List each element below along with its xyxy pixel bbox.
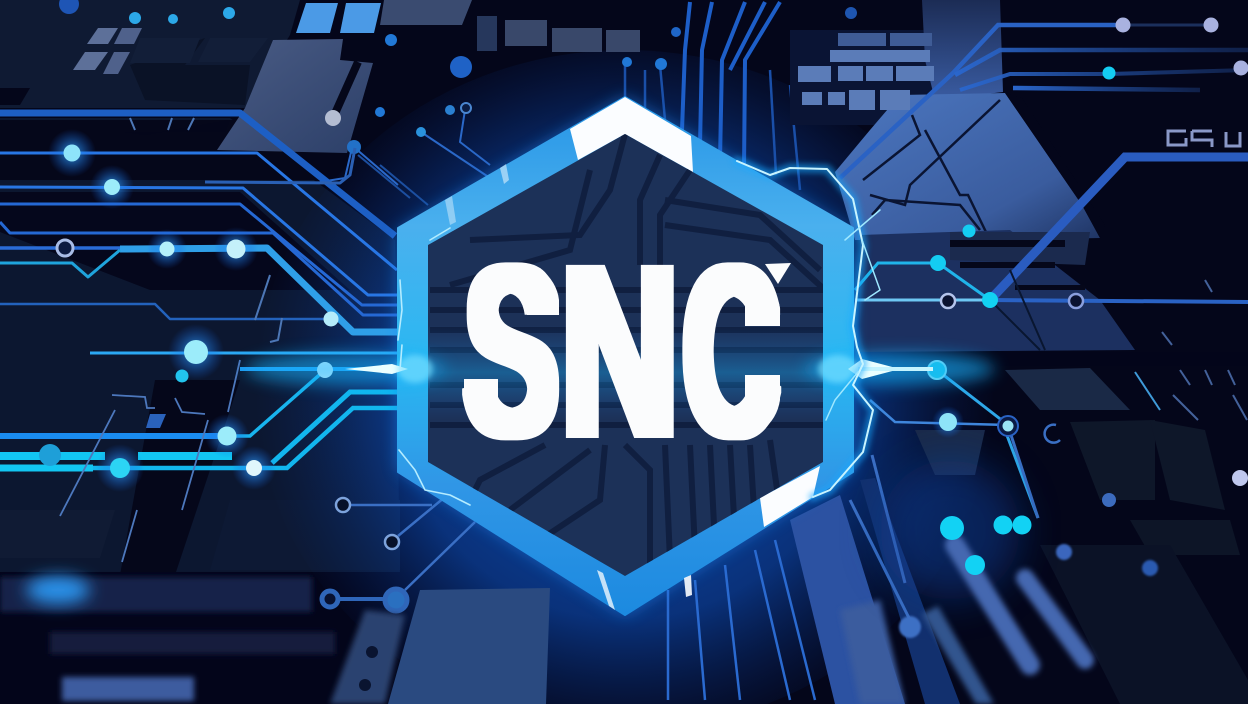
hexagon: blue frame (398, 97, 853, 615)
logo: C tick (765, 263, 791, 284)
logo: SNC lettering (464, 215, 779, 488)
logo: SNC lettering: S (464, 216, 559, 488)
hexagon badge with SNC logo (398, 97, 853, 615)
hexagon: dark inner plate (428, 134, 823, 576)
circuit traces: left upper bus (0, 113, 400, 342)
circuit traces: left lower bus (0, 353, 400, 562)
logo: SNC lettering: C (683, 215, 779, 487)
circuit nodes: upper right (845, 7, 1248, 308)
glowing nodes: left side (39, 129, 338, 492)
logo: SNC lettering: N (561, 215, 679, 487)
circuit traces and nodes: lower right (870, 361, 1248, 704)
light flares at the hexagon sides (245, 353, 995, 385)
glyph marks: upper right corner (1168, 131, 1240, 147)
blurred foreground bars: lower left (0, 576, 405, 704)
chip: large grey-blue module (217, 39, 373, 153)
circuit nodes: upper left of hexagon (320, 103, 490, 205)
panel: left circuit board (0, 0, 420, 704)
hexagon: white frame highlights (445, 97, 820, 610)
ring connectors: lower left (322, 497, 475, 611)
hexagon: central light band (428, 325, 823, 420)
lightning arcs around the hexagon (398, 161, 880, 505)
panel: upper right tile grid and large module (790, 0, 1105, 250)
chip: top-left tiles and blocks (59, 0, 472, 117)
circuit traces: upper right (840, 25, 1248, 350)
panel: lower centre diagonal traces (668, 455, 960, 704)
logo: squared letter terminals (464, 268, 780, 432)
panel: right lower boards (860, 230, 1248, 704)
hexagon: outer glow (398, 97, 853, 615)
hexagon: inner circuit pattern (430, 134, 825, 570)
chip: bottom centre module (388, 588, 550, 704)
top centre circuit blocks and traces (450, 2, 800, 190)
glow behind the hexagon (255, 50, 995, 704)
